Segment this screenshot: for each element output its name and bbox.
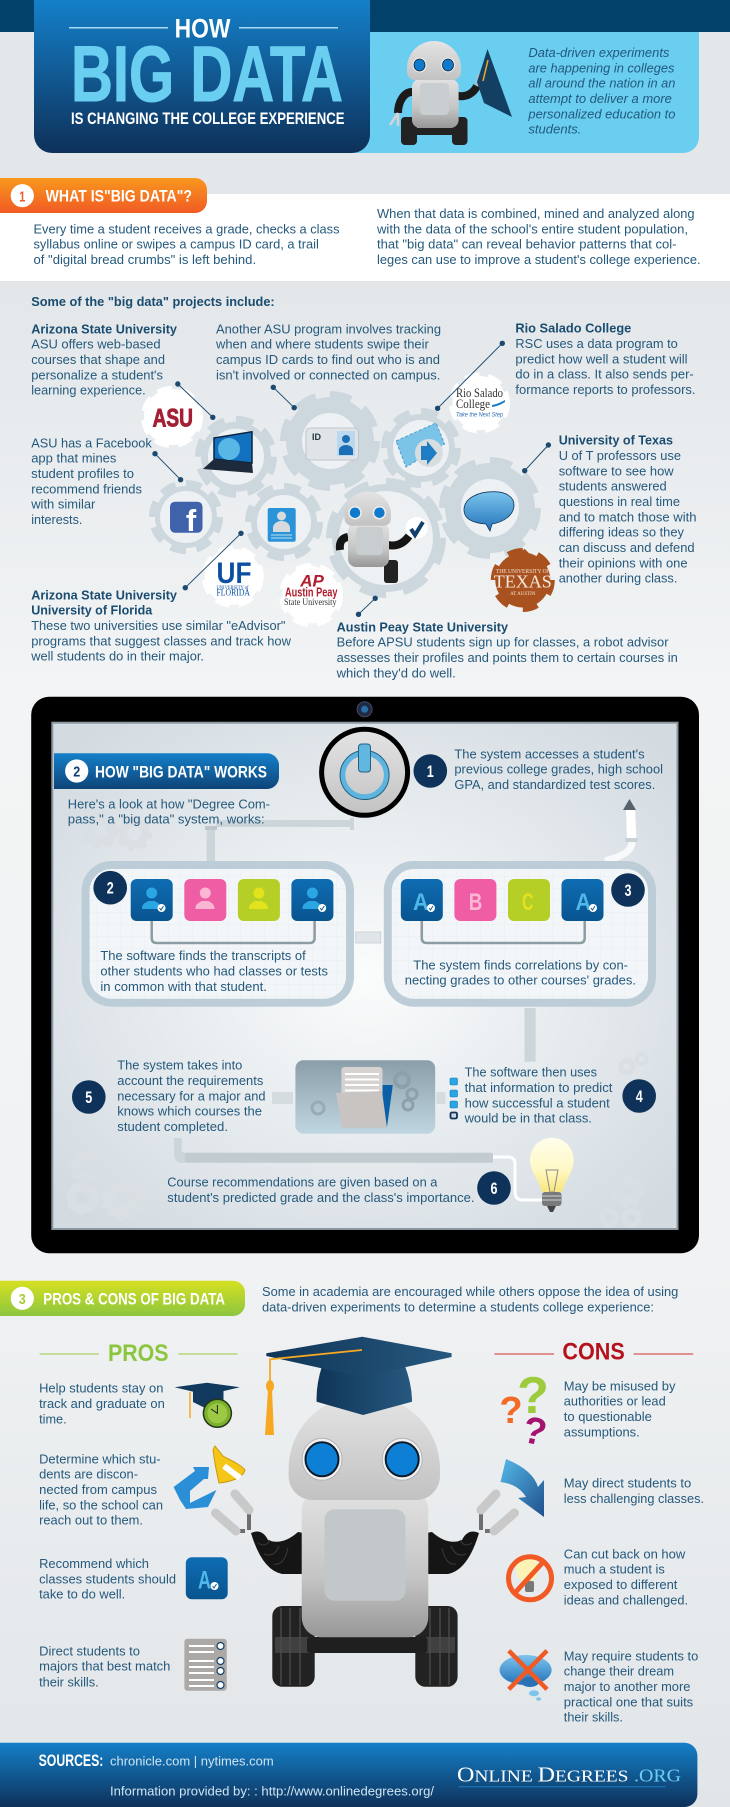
con 3	[508, 1546, 688, 1607]
text: Arizona State and Florida: well students do in their major.	[30, 649, 204, 664]
text: Arizona State University: learning experience.	[31, 383, 146, 398]
intro text: personalized education to	[527, 106, 675, 121]
con 2: less challenging classes.	[564, 1491, 704, 1506]
step 1: 1	[427, 762, 434, 781]
title panel: HOW	[175, 14, 231, 44]
step 5: knows which courses the	[117, 1104, 262, 1119]
logo: Austin Peay	[282, 566, 340, 624]
text: Arizona State and Florida	[30, 587, 292, 664]
pro 4	[39, 1639, 227, 1691]
sources: Information provided by: : http://www.onlinedegrees.org/	[110, 1784, 434, 1799]
logo: University of Texas: AT AUSTIN	[510, 592, 536, 597]
text: in common with that student.	[100, 979, 267, 994]
logo: Rio Salado College: Rio Salado	[456, 385, 503, 400]
con 3: much a student is	[564, 1561, 665, 1576]
gear: facebook	[153, 484, 219, 550]
text: University of Texas: University of Texas	[559, 433, 673, 448]
text: Austin Peay State University: which they'd do well.	[336, 665, 456, 680]
body	[302, 1490, 428, 1637]
intro text: attempt to deliver a more	[528, 91, 672, 106]
con 1: authorities or lead	[564, 1394, 666, 1409]
con 1	[499, 1367, 676, 1455]
text: Arizona State University: personalize a student's	[31, 367, 163, 382]
pro 1: Help students stay on	[39, 1381, 163, 1396]
text: Arizona State University: ASU offers web-based	[31, 337, 161, 352]
heading: cons: CONS	[562, 1338, 625, 1365]
pro 4: Direct students to	[39, 1643, 140, 1658]
text: another ASU program: campus ID cards to find out who is and	[216, 352, 440, 367]
head	[289, 1395, 440, 1500]
heading tag 1: 1	[19, 188, 25, 206]
icon: question marks: ?	[499, 1390, 523, 1432]
text: University of Texas: and to match those with	[559, 509, 696, 524]
step 6: Course recommendations are given based on a	[167, 1175, 438, 1190]
logo: ASU: ASU	[153, 405, 193, 433]
icon: laptop	[203, 432, 253, 473]
con 3: exposed to different	[564, 1577, 678, 1592]
logo: Rio Salado College: College	[456, 396, 490, 411]
con 4	[500, 1648, 698, 1725]
title panel: BIG DATA	[71, 29, 343, 118]
icon: machine with folder	[295, 1060, 435, 1134]
icon: bell and arrows	[174, 1446, 245, 1509]
left paragraph: Every time a student receives a grade, checks a class	[34, 221, 340, 236]
text: The software finds the transcripts of	[100, 948, 306, 963]
step 5: account the requirements	[117, 1073, 264, 1088]
text: ASU Facebook app: app that mines	[31, 451, 117, 466]
left paragraph: syllabus online or swipes a campus ID card, a trail	[34, 237, 319, 252]
text	[405, 957, 636, 988]
heading tag 1	[0, 178, 207, 213]
step 5: student completed.	[117, 1119, 228, 1134]
step 4: would be in that class.	[464, 1111, 592, 1126]
right paragraph: that "big data" can reveal behavior patterns that col-	[377, 237, 676, 252]
header banner	[0, 0, 730, 153]
icon: question marks	[499, 1367, 550, 1455]
con 4: their skills.	[564, 1710, 623, 1725]
con 2	[500, 1459, 704, 1517]
text: other students who had classes or tests	[100, 963, 328, 978]
heading tag 3	[0, 1281, 245, 1316]
text: another ASU program	[215, 321, 441, 382]
tile: blue student	[131, 879, 173, 921]
step 5: The system takes into	[117, 1058, 242, 1073]
tile: grade A: A	[576, 889, 591, 916]
text: University of Texas: U of T professors use	[559, 448, 681, 463]
gear: id card	[284, 395, 376, 487]
graduation cap	[265, 1337, 452, 1435]
footer	[0, 1743, 697, 1807]
connector	[152, 921, 315, 943]
illustration: large robot with graduation cap	[216, 1337, 514, 1687]
con 3: ideas and challenged.	[564, 1592, 688, 1607]
tile: grade C: C	[522, 889, 534, 916]
gear: profile	[249, 487, 319, 557]
text	[100, 948, 328, 994]
heading tag 2: 2	[73, 764, 80, 780]
gear: laptop	[199, 420, 273, 494]
section 3 intro text: data-driven experiments to determine a students college experience:	[262, 1299, 654, 1314]
text: ASU Facebook app: with similar	[30, 497, 96, 512]
con 4: May require students to	[564, 1648, 698, 1663]
text: another ASU program: when and where students swipe their	[215, 337, 429, 352]
pro 3	[39, 1556, 228, 1602]
icon: down arrow	[500, 1459, 544, 1517]
con 1: May be misused by	[564, 1378, 676, 1393]
intro text: pass," a "big data" system, works:	[68, 812, 265, 827]
text: Austin Peay State University: Before APSU students sign up for classes, a robot advisor	[337, 635, 669, 650]
right paragraph: When that data is combined, mined and analyzed along	[377, 206, 695, 221]
text: ASU Facebook app: recommend friends	[31, 481, 142, 496]
step 5: necessary for a major and	[117, 1088, 266, 1103]
tile: grade B: B	[469, 889, 482, 916]
tile: green student	[238, 879, 280, 921]
text: necting grades to other courses' grades.	[405, 973, 636, 988]
text: Rio Salado College: RSC uses a data program to	[515, 336, 678, 351]
icon: light bulb	[530, 1138, 574, 1212]
con 4: practical one that suits	[564, 1694, 694, 1709]
text: ASU Facebook app: student profiles to	[31, 466, 134, 481]
logo: online degrees: .ORG	[634, 1765, 681, 1785]
text: University of Texas: questions in real time	[559, 494, 680, 509]
icon: question marks: ?	[519, 1409, 550, 1455]
icon: camera	[357, 702, 372, 717]
pro 2: Determine which stu-	[39, 1451, 161, 1466]
logo: University of Florida: UNIVERSITY of	[216, 586, 249, 591]
heading tag 1: WHAT IS"BIG DATA"?	[46, 187, 192, 206]
icon: profile card	[268, 508, 296, 542]
text: Arizona State and Florida: Arizona State University	[31, 587, 178, 602]
con 4: change their dream	[564, 1664, 674, 1679]
checklist	[450, 1078, 458, 1118]
text: University of Texas: students answered	[559, 479, 667, 494]
icon: no light bulb	[508, 1556, 552, 1600]
leader lines	[153, 341, 551, 616]
pro 4: majors that best match	[39, 1659, 170, 1674]
logo: University of Texas	[493, 550, 552, 610]
section 3 intro text	[262, 1284, 678, 1314]
text: University of Texas: their opinions with one	[559, 555, 688, 570]
intro text	[527, 45, 675, 137]
text: Rio Salado College: do in a class. It also sends per-	[515, 367, 694, 382]
right paragraph	[376, 206, 701, 267]
logo: University of Florida: UF	[216, 557, 252, 590]
heading tag 2: HOW "BIG DATA" WORKS	[95, 762, 267, 781]
logo: University of Texas: THE UNIVERSITY OF	[496, 569, 550, 575]
box: step 2 transcripts: 2	[107, 879, 114, 898]
text: another ASU program: isn't involved or connected on campus.	[216, 367, 440, 382]
intro text: students.	[528, 122, 581, 137]
text: Arizona State University	[31, 321, 178, 398]
icon: grade A tile	[186, 1557, 228, 1599]
panel: tablet how big data works	[31, 697, 699, 1253]
text: ASU Facebook app: ASU has a Facebook	[31, 435, 152, 450]
icon: crossed out thought cloud	[500, 1651, 552, 1701]
logo: University of Florida	[204, 548, 261, 605]
text: The system finds correlations by con-	[413, 957, 628, 972]
step 4: that information to predict	[465, 1080, 613, 1095]
icon: pipe with arrow to step 1	[605, 799, 638, 861]
con 3: Can cut back on how	[564, 1546, 686, 1561]
tile: grade B	[454, 879, 496, 921]
pipes	[174, 818, 536, 1163]
icon: checklist sheet	[184, 1639, 227, 1691]
text: Arizona State University: courses that shape and	[31, 352, 165, 367]
gear: film	[385, 412, 457, 484]
text: Austin Peay State University: assesses their profiles and points them to certain courses in	[337, 650, 678, 665]
left paragraph: of "digital bread crumbs" is left behind.	[34, 252, 256, 267]
panel: what is big data	[0, 178, 730, 281]
pro 3: Recommend which	[39, 1556, 149, 1571]
title panel	[34, 0, 370, 153]
left paragraph	[34, 221, 340, 267]
intro text: Data-driven experiments	[528, 45, 670, 60]
heading tag 3: PROS & CONS OF BIG DATA	[43, 1289, 225, 1308]
text: Arizona State and Florida: programs that suggest classes and track how	[31, 633, 292, 648]
arms	[216, 1494, 514, 1574]
icon: id card: ID	[312, 432, 322, 442]
section 3 intro text: Some in academia are encouraged while others oppose the idea of using	[262, 1284, 678, 1299]
con 4: major to another more	[564, 1679, 690, 1694]
icon: facebook: f	[186, 503, 197, 538]
heading: projects: Some of the "big data" projects include:	[31, 294, 275, 309]
faint gears	[68, 813, 646, 1225]
gear: robot	[330, 482, 442, 594]
step 1	[414, 746, 663, 792]
sources: chronicle.com | nytimes.com	[110, 1753, 274, 1768]
con 2: May direct students to	[564, 1476, 691, 1491]
text: Arizona State and Florida: University of Florida	[31, 603, 153, 618]
icon: robot holding graduation cap	[390, 41, 512, 145]
logo: Austin Peay: State University	[284, 597, 337, 607]
eyes	[302, 1438, 422, 1480]
step 5	[72, 1058, 266, 1134]
icon: power button	[322, 729, 408, 815]
sources: SOURCES:	[39, 1751, 103, 1770]
step 6	[167, 1171, 511, 1205]
tile: grade A: A	[413, 889, 429, 916]
text: Rio Salado College: predict how well a student will	[515, 351, 688, 366]
pro 2: life, so the school can	[39, 1497, 163, 1512]
text: Rio Salado College: Rio Salado College	[515, 321, 631, 336]
intro text: are happening in colleges	[528, 60, 675, 75]
title panel: IS CHANGING THE COLLEGE EXPERIENCE	[71, 109, 344, 128]
pro 2	[39, 1446, 245, 1528]
text: University of Texas: can discuss and defend	[559, 540, 695, 555]
connector	[422, 921, 585, 943]
heading tag 2	[54, 753, 279, 789]
gear cluster	[153, 395, 537, 594]
icon: grade A tile: A	[198, 1566, 211, 1594]
step 4: The software then uses	[465, 1065, 597, 1080]
step 4: 4	[636, 1087, 643, 1106]
pro 3: take to do well.	[39, 1587, 125, 1602]
step 4: how successful a student	[465, 1096, 610, 1111]
pro 1: time.	[39, 1411, 67, 1426]
text: University of Texas: another during class.	[559, 571, 677, 586]
box: step 3 correlations: 3	[624, 881, 632, 900]
intro text: Here's a look at how "Degree Com-	[68, 796, 270, 811]
step 1: The system accesses a student's	[454, 746, 645, 761]
right paragraph: with the data of the school's entire student population,	[376, 221, 688, 236]
pro 1	[39, 1381, 240, 1427]
logo: Rio Salado College	[452, 375, 508, 431]
intro text: all around the nation in an	[528, 76, 675, 91]
text: Austin Peay State University: Austin Peay State University	[337, 619, 509, 634]
text: University of Texas: differing ideas so they	[559, 525, 684, 540]
tile: blue student	[291, 879, 333, 921]
step 6: student's predicted grade and the class's importance.	[167, 1190, 475, 1205]
logo: Austin Peay: Austin Peay	[285, 585, 338, 600]
text: ASU Facebook app: interests.	[31, 512, 82, 527]
wire to bulb	[493, 1157, 544, 1200]
pro 1: track and graduate on	[39, 1396, 165, 1411]
tile: pink student	[184, 879, 226, 921]
right paragraph: leges can use to improve a student's college experience.	[377, 252, 701, 267]
gear: chat	[443, 461, 537, 555]
text: Austin Peay State University	[336, 619, 678, 680]
wheels	[272, 1606, 458, 1687]
step 1: previous college grades, high school	[454, 762, 663, 777]
intro text	[68, 796, 270, 827]
pro 2: dents are discon-	[39, 1467, 138, 1482]
logo: University of Texas: TEXAS	[494, 572, 552, 592]
heading: pros: PROS	[108, 1340, 168, 1367]
body screen	[324, 1509, 406, 1601]
step 5: 5	[85, 1088, 92, 1107]
text: ASU Facebook app	[30, 435, 152, 527]
pro 4: their skills.	[39, 1674, 99, 1689]
icon: cap and clock	[175, 1383, 240, 1427]
logo: ASU	[144, 388, 200, 446]
icon: question marks: ?	[517, 1367, 549, 1425]
text: Rio Salado College	[515, 321, 696, 397]
text: Rio Salado College: formance reports to professors.	[515, 382, 696, 397]
step 4	[450, 1065, 656, 1126]
text: Arizona State and Florida: These two universities use similar "eAdvisor"	[31, 618, 286, 633]
tile: grade C	[508, 879, 550, 921]
con 1: assumptions.	[564, 1424, 640, 1439]
box: step 2 transcripts	[86, 865, 350, 1003]
icon: film and play button	[396, 423, 445, 467]
step 1: GPA, and standardized test scores.	[454, 777, 655, 792]
pro 3: classes students should	[39, 1571, 176, 1586]
logo: online degrees: ONLINE DEGREES	[457, 1762, 628, 1786]
icon: robot with checkmark	[340, 491, 428, 583]
tile: grade A	[401, 879, 443, 921]
heading tag 3: 3	[19, 1291, 26, 1308]
con 1: to questionable	[564, 1409, 652, 1424]
pro 2: reach out to them.	[39, 1513, 143, 1528]
text: University of Texas: software to see how	[559, 463, 674, 478]
logo: Austin Peay: AP	[299, 572, 324, 591]
text: Arizona State University: Arizona State University	[31, 321, 178, 336]
light blue intro panel	[340, 32, 699, 153]
pro 2: nected from campus	[39, 1482, 157, 1497]
text: another ASU program: Another ASU program involves tracking	[216, 321, 441, 336]
logo: University of Florida: FLORIDA	[216, 588, 250, 598]
text: University of Texas	[559, 433, 696, 586]
box: step 3 correlations	[388, 865, 652, 1003]
logo: Rio Salado College: Take the Next Step	[456, 412, 503, 419]
sources	[39, 1751, 434, 1799]
tile: grade A	[562, 879, 604, 921]
icon: speech bubble	[464, 492, 514, 531]
step 6: 6	[490, 1179, 498, 1198]
